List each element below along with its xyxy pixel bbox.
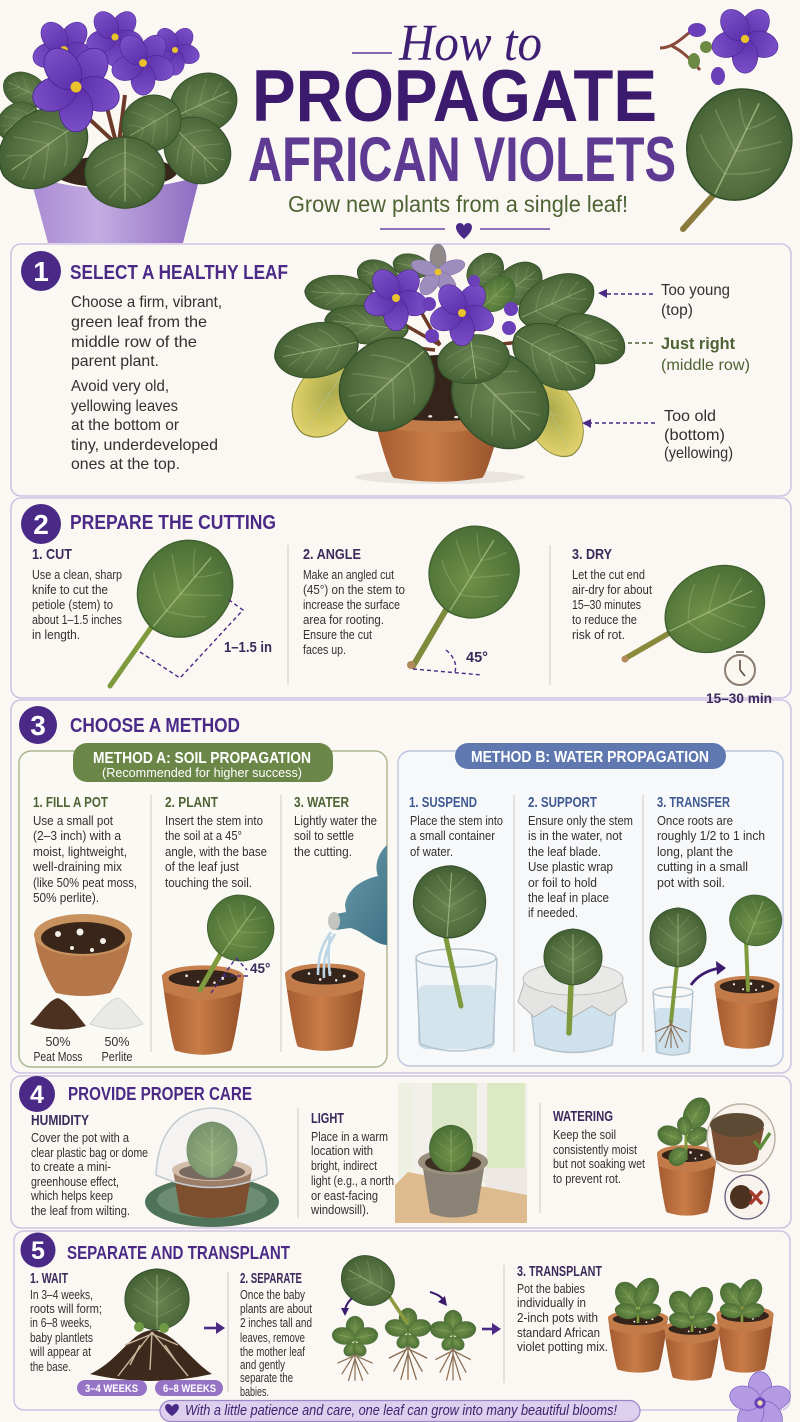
separate text: and gently	[240, 1357, 285, 1372]
A2 planted leaf: 45°	[250, 961, 270, 976]
step number 3	[19, 706, 57, 744]
separate text: the mother leaf	[240, 1344, 305, 1359]
light text: or east-facing	[311, 1188, 378, 1203]
step number 4: 4	[30, 1081, 44, 1109]
method A: soil propagation	[19, 743, 387, 1067]
body text 1	[71, 294, 222, 473]
callout: too young: Too young	[661, 282, 730, 299]
step number 5: 5	[31, 1237, 45, 1265]
A1 peat moss: 50%	[45, 1035, 71, 1049]
A1 text: Use a small pot	[33, 813, 113, 828]
timeline pill: 3-4 weeks	[77, 1380, 147, 1396]
step 2.1 text: about 1–1.5 inches	[32, 612, 122, 627]
A1 text: (2–3 inch) with a	[33, 828, 122, 843]
step 2.1 text: petiole (stem) to	[32, 597, 113, 612]
A1 text: 50% perlite).	[33, 890, 99, 905]
method B: water propagation	[398, 743, 789, 1066]
A2 text: the soil at a 45°	[165, 828, 242, 843]
B1 leaf in glass	[411, 863, 497, 1051]
panel 2: prepare the cutting	[11, 498, 791, 706]
timeline pill: 6-8 weeks	[155, 1380, 223, 1396]
B2 text: Ensure only the stem	[528, 813, 633, 828]
watering plant	[655, 1093, 717, 1216]
body text 1: middle row of the	[71, 334, 197, 351]
leaf with measurement	[110, 521, 272, 686]
method A banner: (Recommended for higher success)	[102, 766, 302, 780]
wait text: will appear at	[29, 1344, 91, 1359]
method A banner: METHOD A: SOIL PROPAGATION	[93, 750, 311, 767]
A2 text: of the leaf just	[165, 859, 239, 874]
step number 2	[21, 504, 61, 544]
humidity text	[30, 1112, 148, 1218]
step number 2: 2	[33, 509, 49, 540]
subtitle: Grow new plants from a single leaf!	[288, 191, 628, 217]
step number 4	[19, 1076, 55, 1112]
B1 text: 1. SUSPEND	[409, 794, 477, 811]
separate text: Once the baby	[240, 1287, 305, 1302]
body text 1: Choose a firm, vibrant,	[71, 294, 222, 311]
drying leaf	[622, 549, 780, 669]
heading 5: SEPARATE AND TRANSPLANT	[67, 1242, 291, 1263]
panel 3: choose a method	[11, 700, 791, 1073]
A1 text: well-draining mix	[32, 859, 122, 874]
callout: too old: (yellowing)	[664, 445, 733, 462]
icon: heart	[165, 1404, 179, 1416]
A3 text: 3. WATER	[294, 794, 349, 811]
watering text: Keep the soil	[553, 1127, 616, 1142]
B1 text: Place the stem into	[410, 813, 503, 828]
timeline pill: 6-8 weeks: 6–8 WEEKS	[163, 1383, 216, 1395]
B3 text: pot with soil.	[657, 875, 725, 890]
body text 1: yellowing leaves	[71, 398, 178, 415]
transplant text: violet potting mix.	[517, 1339, 608, 1354]
watering text: but not soaking wet	[553, 1156, 645, 1171]
timer label: 15–30 min	[706, 690, 772, 706]
step number 5	[20, 1232, 56, 1268]
B3 potted cutting	[714, 887, 789, 1049]
A2 text: touching the soil.	[165, 875, 252, 890]
light text: light (e.g., a north	[311, 1173, 394, 1188]
footer message: With a little patience and care, one leaf can grow into many beautiful blooms!	[185, 1402, 618, 1419]
light text: location with	[311, 1143, 373, 1158]
B2 text: the leaf in place	[528, 890, 609, 905]
humidity text: the leaf from wilting.	[31, 1203, 130, 1218]
step number 3: 3	[30, 710, 46, 741]
panel 4: provide proper care	[11, 1076, 791, 1228]
transplant text: 3. TRANSPLANT	[517, 1263, 602, 1280]
step 2.3 text: to reduce the	[572, 612, 637, 627]
leaf with 45 degree cut: 45°	[466, 650, 488, 666]
method A banner	[73, 743, 333, 782]
arrow	[482, 1323, 501, 1335]
step number 1: 1	[33, 256, 49, 287]
method B banner: METHOD B: WATER PROPAGATION	[471, 749, 709, 766]
step 2.2 text: Make an angled cut	[303, 567, 394, 582]
step 2.1 text: in length.	[32, 627, 80, 642]
step 2.2 text	[303, 546, 405, 657]
dome illustration	[145, 1108, 279, 1227]
A2 text: 2. PLANT	[165, 794, 218, 811]
A3 text: the cutting.	[294, 844, 352, 859]
body text 1: at the bottom or	[71, 417, 180, 434]
step 2.2 text: faces up.	[303, 642, 346, 657]
transplant text: individually in	[517, 1295, 586, 1310]
separate text: 2 inches tall and	[240, 1315, 312, 1330]
wet soil cross	[725, 1175, 769, 1219]
A3 text: soil to settle	[294, 828, 354, 843]
light text: Place in a warm	[311, 1129, 388, 1144]
callout: too old: (bottom)	[664, 427, 725, 444]
separate text: separate the	[240, 1370, 293, 1385]
separate text: leaves, remove	[240, 1330, 305, 1345]
step number 1	[21, 251, 61, 291]
step 2.2 text: area for rooting.	[303, 612, 384, 627]
header decoration: flower sprig	[660, 4, 781, 85]
separate text	[240, 1270, 312, 1399]
B3 text: cutting in a small	[657, 859, 748, 874]
step 2.3 text: risk of rot.	[572, 627, 625, 642]
body text 1: Avoid very old,	[71, 378, 169, 395]
A3 text: Lightly water the	[294, 813, 377, 828]
wait text: in 6–8 weeks,	[30, 1315, 92, 1330]
B3 text: 3. TRANSFER	[657, 794, 730, 811]
heading 4: PROVIDE PROPER CARE	[68, 1083, 252, 1104]
callout: just right	[624, 334, 750, 374]
humidity text: clear plastic bag or dome	[31, 1145, 148, 1160]
A1 peat moss: Peat Moss	[34, 1050, 82, 1064]
B2 text: if needed.	[528, 905, 578, 920]
watering text: consistently moist	[553, 1142, 637, 1157]
step 2.2 text: Ensure the cut	[303, 627, 372, 642]
transplant text: 2-inch pots with	[517, 1310, 598, 1325]
heading 2: PREPARE THE CUTTING	[70, 512, 276, 534]
A1 perlite	[90, 998, 143, 1064]
heart divider	[380, 223, 550, 239]
transplant text: standard African	[517, 1325, 600, 1340]
step 2.2 text: 2. ANGLE	[303, 546, 361, 563]
light text: bright, indirect	[311, 1158, 377, 1173]
heading 1: SELECT A HEALTHY LEAF	[70, 262, 288, 284]
callout: just right: (middle row)	[661, 357, 750, 374]
panel 1: select a healthy leaf	[11, 244, 791, 496]
watering text: WATERING	[553, 1108, 613, 1125]
B2 text: is in the water, not	[528, 828, 622, 843]
A1 text: moist, lightweight,	[33, 844, 127, 859]
moist soil check	[707, 1104, 775, 1172]
A1 perlite: Perlite	[102, 1050, 133, 1064]
body text 1: green leaf from the	[71, 314, 207, 331]
humidity text: Cover the pot with a	[31, 1130, 130, 1145]
A2 planted leaf	[162, 882, 287, 1055]
A1 text: (like 50% peat moss,	[33, 875, 137, 890]
step 2.3 text: 3. DRY	[572, 546, 612, 563]
step 2.3 text: air-dry for about	[572, 582, 652, 597]
step 2.3 text: 15–30 minutes	[572, 597, 641, 612]
arrow	[204, 1322, 225, 1334]
footer banner	[160, 1400, 640, 1422]
separate text: plants are about	[240, 1301, 312, 1316]
transplant text: Pot the babies	[517, 1281, 585, 1296]
A3 watering	[285, 845, 387, 1051]
A1 text	[32, 794, 137, 905]
wait text: the base.	[30, 1359, 71, 1374]
heading 3: CHOOSE A METHOD	[70, 715, 240, 737]
humidity text: HUMIDITY	[31, 1112, 89, 1129]
step 2.3 text: Let the cut end	[572, 567, 645, 582]
step 2.1 text: knife to cut the	[32, 582, 108, 597]
watering text: to prevent rot.	[553, 1171, 621, 1186]
B3 text: Once roots are	[657, 813, 733, 828]
body text 1: ones at the top.	[71, 456, 180, 473]
timeline pill: 3-4 weeks: 3–4 WEEKS	[85, 1383, 138, 1395]
wait text	[29, 1270, 102, 1374]
B1 text	[409, 794, 503, 859]
header illustration: potted African violet	[0, 7, 247, 243]
icon: timer	[725, 652, 755, 685]
header decoration: single leaf	[668, 71, 800, 229]
B3 text	[657, 794, 765, 890]
callout: too old: Too old	[664, 408, 716, 425]
separate text: babies.	[240, 1384, 269, 1399]
wait text: roots will form;	[30, 1301, 102, 1316]
leaf with measurement: 1–1.5 in	[224, 640, 272, 656]
wait text: baby plantlets	[30, 1330, 93, 1345]
A1 text: 1. FILL A POT	[33, 794, 108, 811]
A3 text	[294, 794, 377, 859]
body text 1: tiny, underdeveloped	[71, 437, 218, 454]
step 2.1 text: Use a clean, sharp	[32, 567, 122, 582]
window scene	[395, 1083, 527, 1223]
B2 text: Use plastic wrap	[528, 859, 613, 874]
A1 peat moss	[30, 998, 86, 1064]
B3 rooted cutting	[650, 908, 706, 1055]
title: How to: How to	[398, 15, 542, 72]
step 2.2 text: increase the surface	[303, 597, 400, 612]
corner flower	[727, 1372, 793, 1422]
step 2.3 text	[572, 546, 652, 642]
leaf with 45 degree cut	[407, 509, 536, 675]
wait text: 1. WAIT	[30, 1270, 68, 1287]
method B banner	[455, 743, 726, 769]
parent plant illustration	[270, 244, 633, 484]
panel 5: separate and transplant	[14, 1231, 790, 1410]
wait text: In 3–4 weeks,	[30, 1287, 93, 1302]
B1 text: of water.	[410, 844, 453, 859]
B1 text: a small container	[410, 828, 496, 843]
B2 leaf in covered jar	[518, 929, 627, 1052]
three potted babies	[608, 1274, 774, 1381]
humidity text: greenhouse effect,	[31, 1174, 119, 1189]
humidity text: which helps keep	[30, 1188, 113, 1203]
callout: too young: (top)	[661, 302, 693, 319]
B2 text: the leaf blade.	[528, 844, 601, 859]
B2 text	[528, 794, 633, 920]
separate text: 2. SEPARATE	[240, 1270, 302, 1287]
light text: LIGHT	[311, 1110, 344, 1127]
callout: too old	[582, 408, 733, 462]
rooted leaf in soil	[90, 1269, 212, 1381]
B3 text: long, plant the	[657, 844, 733, 859]
A1 perlite: 50%	[104, 1035, 130, 1049]
B2 text: or foil to hold	[528, 875, 597, 890]
humidity text: to create a mini-	[31, 1159, 111, 1174]
B2 text: 2. SUPPORT	[528, 794, 597, 811]
step 2.1 text: 1. CUT	[32, 546, 72, 563]
callout: just right: Just right	[661, 334, 735, 353]
A2 text	[165, 794, 267, 890]
body text 1: parent plant.	[71, 353, 159, 370]
title: Propagate: PROPAGATE	[252, 56, 657, 137]
A1 pot of soil	[34, 914, 132, 996]
B3 transfer arrow	[691, 961, 726, 985]
transplant text	[517, 1263, 608, 1354]
step 2.1 text	[32, 546, 122, 642]
A2 text: Insert the stem into	[165, 813, 263, 828]
A2 text: angle, with the base	[165, 844, 267, 859]
mother leaf and babies	[331, 1246, 477, 1381]
light text: windowsill).	[310, 1202, 369, 1217]
step 2.2 text: (45°) on the stem to	[303, 582, 405, 597]
light text	[310, 1110, 394, 1217]
watering text	[553, 1108, 645, 1186]
callout: too young	[598, 282, 730, 319]
B3 text: roughly 1/2 to 1 inch	[657, 828, 765, 843]
